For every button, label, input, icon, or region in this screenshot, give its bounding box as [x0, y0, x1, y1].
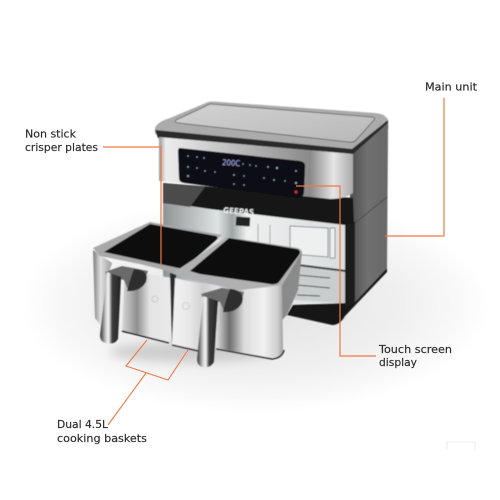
leader bracket	[108, 340, 188, 425]
right basket outer wall	[216, 285, 283, 358]
leader line	[103, 147, 161, 265]
window inner frames	[290, 226, 335, 258]
dark rim	[155, 120, 388, 154]
left basket interior	[104, 224, 218, 269]
leader line	[296, 186, 376, 356]
callout: dual cooking baskets: cooking baskets	[57, 433, 147, 445]
black column	[345, 222, 355, 306]
door latch	[236, 217, 250, 226]
lid inset panel	[175, 104, 375, 142]
callout: dual cooking baskets	[57, 340, 188, 445]
right basket interior	[190, 238, 300, 284]
basket shadow	[110, 342, 270, 362]
left basket outer wall	[93, 250, 112, 327]
air fryer main unit	[155, 102, 388, 325]
right wall base edge	[216, 349, 284, 359]
window lower drawer	[294, 264, 346, 303]
display panel	[178, 148, 305, 198]
callout: touch screen display	[296, 186, 452, 369]
left basket rim	[93, 222, 222, 273]
corner widget	[447, 442, 475, 450]
callout: non stick crisper plates	[25, 128, 161, 265]
touch buttons	[187, 155, 297, 186]
callout: touch screen display: display	[379, 357, 417, 369]
label: Dual 4.5L	[57, 419, 108, 431]
handle bracket left	[105, 266, 148, 290]
leader line	[385, 98, 444, 236]
basket divider	[170, 273, 176, 346]
right basket side	[281, 252, 302, 320]
label: Main unit	[425, 82, 477, 94]
brand logo: GEEPAS	[223, 206, 255, 217]
label: Touch screen	[378, 344, 452, 356]
right basket rim	[173, 237, 302, 290]
handle bracket right	[201, 288, 244, 311]
floor shadow	[20, 197, 490, 413]
label: Non stick	[25, 128, 77, 140]
black base	[287, 268, 387, 325]
left front panel	[122, 270, 172, 342]
right handle	[197, 296, 218, 367]
display temperature readout: 200C	[222, 158, 241, 168]
callout: main unit	[385, 82, 477, 236]
callout: non stick crisper plates: crisper plates	[25, 142, 98, 154]
lid	[155, 102, 388, 151]
left panel base edge	[122, 331, 169, 343]
window glass	[163, 200, 346, 305]
baskets	[93, 222, 302, 367]
black fascia	[163, 183, 354, 225]
basket number markings	[152, 296, 158, 302]
power button	[294, 190, 298, 194]
left handle	[100, 272, 121, 344]
right side panel	[350, 119, 388, 302]
right panel base edge	[172, 345, 198, 351]
stainless control band	[159, 137, 353, 199]
right front panel	[172, 278, 203, 349]
